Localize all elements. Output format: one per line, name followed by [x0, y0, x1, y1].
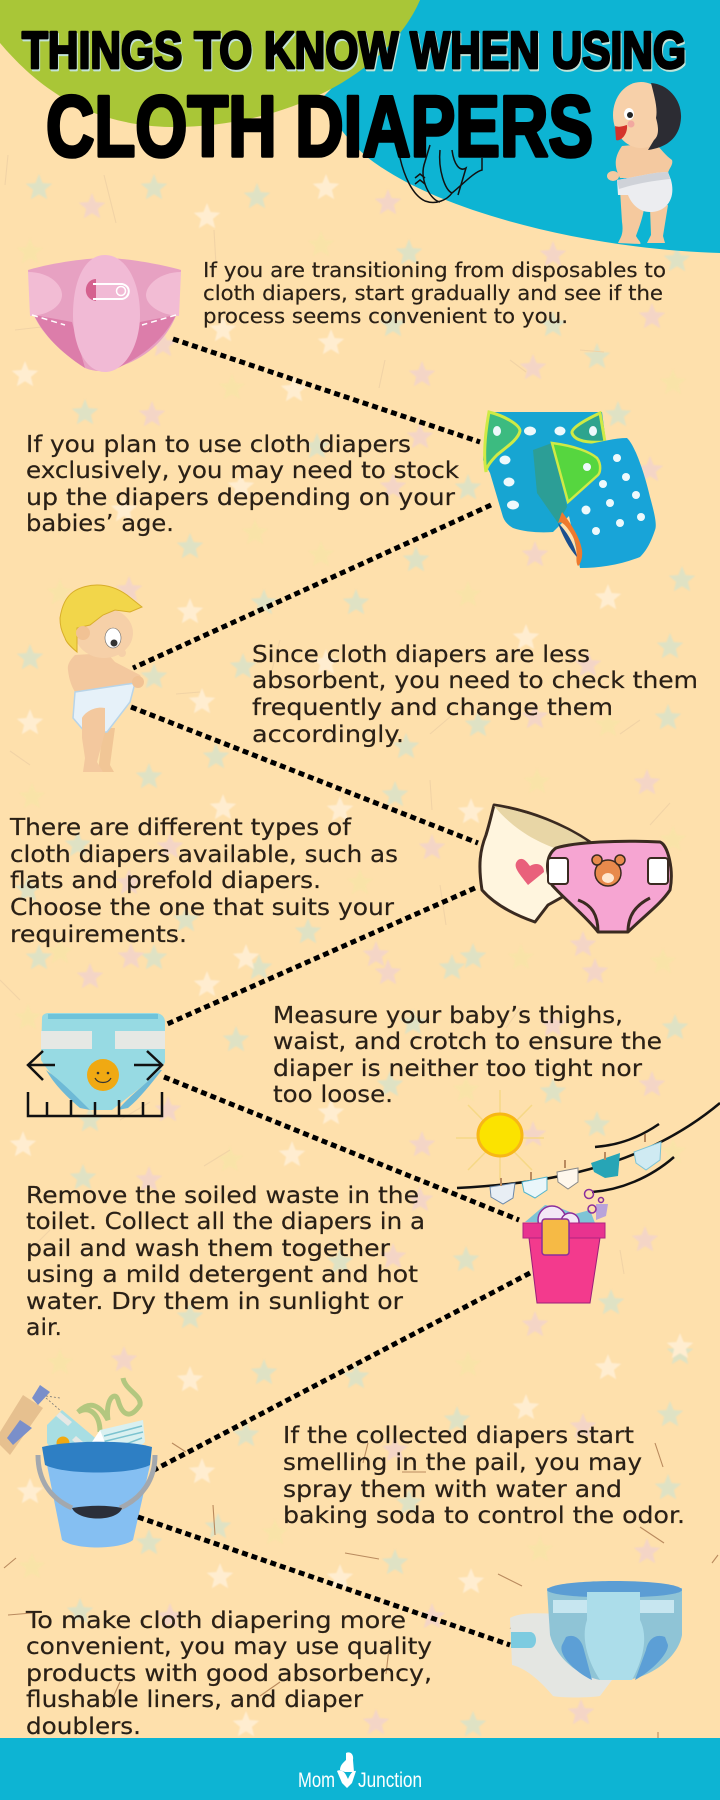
green header curve: [0, 0, 420, 127]
text block 2: babies’ age.: [26, 511, 174, 537]
logo: MomJunction: Junction: [358, 1769, 422, 1792]
icon: clothesline with drying diapers: [457, 1103, 720, 1204]
text block 8: convenient, you may use quality: [26, 1634, 432, 1660]
icon: pink wash bucket with foam: [523, 1190, 608, 1303]
text block 6: [26, 1183, 425, 1341]
title: [22, 22, 686, 175]
icon: sun: [456, 1090, 544, 1180]
text block 8: To make cloth diapering more: [25, 1608, 406, 1634]
icon: spray bottle: [0, 1385, 62, 1455]
icon: blue and grey disposable diaper: [510, 1581, 682, 1698]
text block 1: process seems convenient to you.: [203, 304, 568, 328]
text block 2: If you plan to use cloth diapers: [26, 432, 411, 458]
text block 6: water. Dry them in sunlight or: [26, 1289, 404, 1315]
dotted connector 2: [133, 505, 491, 668]
text block 7: spray them with water and: [283, 1477, 622, 1503]
text block 5: waist, and crotch to ensure the: [273, 1029, 662, 1055]
dotted connector 7: [138, 1517, 510, 1645]
text block 7: [283, 1423, 685, 1529]
text block 4: requirements.: [10, 922, 187, 948]
icon: pair of cloth diapers with heart and bear: [480, 805, 671, 932]
text block 8: [25, 1608, 432, 1740]
dotted connector 6: [154, 1273, 530, 1470]
text block 3: [252, 642, 698, 748]
text block 8: flushable liners, and diaper: [26, 1687, 364, 1713]
text block 1: If you are transitioning from disposables to: [203, 258, 666, 282]
text block 2: up the diapers depending on your: [26, 485, 456, 511]
icon: pink diaper with safety pin: [28, 255, 181, 372]
logo: MomJunction: [298, 1752, 422, 1792]
text block 4: Choose the one that suits your: [10, 895, 395, 921]
text block 6: toilet. Collect all the diapers in a: [26, 1209, 425, 1235]
text block 6: Remove the soiled waste in the: [26, 1183, 419, 1209]
text block 8: doublers.: [26, 1714, 141, 1740]
text block 5: Measure your baby’s thighs,: [273, 1003, 623, 1029]
text block 3: accordingly.: [252, 722, 404, 748]
text block 3: frequently and change them: [252, 695, 613, 721]
text block 3: Since cloth diapers are less: [252, 642, 590, 668]
text block 7: baking soda to control the odor.: [283, 1503, 685, 1529]
text block 4: cloth diapers available, such as: [10, 842, 398, 868]
text block 5: diaper is neither too tight nor: [273, 1056, 643, 1082]
text block 1: cloth diapers, start gradually and see if the: [203, 281, 663, 305]
text block 4: flats and prefold diapers.: [10, 868, 321, 894]
icon: baby in diaper header: [607, 82, 681, 244]
text block 4: [9, 815, 398, 948]
text block 5: too loose.: [273, 1082, 393, 1108]
text block 2: [26, 432, 460, 537]
teal header curve: [320, 0, 720, 253]
text block 1: [203, 258, 666, 328]
text block 4: There are different types of: [9, 815, 352, 841]
icon: blond baby checking diaper: [60, 585, 144, 772]
dotted connector 5: [164, 1077, 519, 1220]
header background curves: [0, 0, 720, 253]
text block 7: If the collected diapers start: [283, 1423, 634, 1449]
icon: outlined diaper behind title: [400, 145, 482, 202]
dotted connector 1: [173, 339, 480, 442]
footer bar with logo: [0, 1738, 720, 1800]
text block 6: pail and wash them together: [26, 1236, 391, 1262]
text block 3: absorbent, you need to check them: [252, 668, 698, 694]
icon: blue bucket with smelly diapers: [38, 1378, 155, 1548]
dotted connector 3: [131, 707, 478, 843]
text block 8: products with good absorbency,: [26, 1661, 432, 1687]
logo: MomJunction: Mom: [298, 1769, 335, 1792]
text block 2: exclusively, you may need to stock: [26, 458, 460, 484]
dotted connector 4: [165, 888, 475, 1025]
text block 7: smelling in the pail, you may: [283, 1450, 642, 1476]
text block 5: [273, 1003, 662, 1108]
text block 6: using a mild detergent and hot: [26, 1262, 418, 1288]
icon: teal dotted cloth diaper: [483, 412, 656, 568]
icon: blue diaper with arrows and ruler: [28, 1013, 165, 1116]
text block 6: air.: [26, 1315, 62, 1341]
